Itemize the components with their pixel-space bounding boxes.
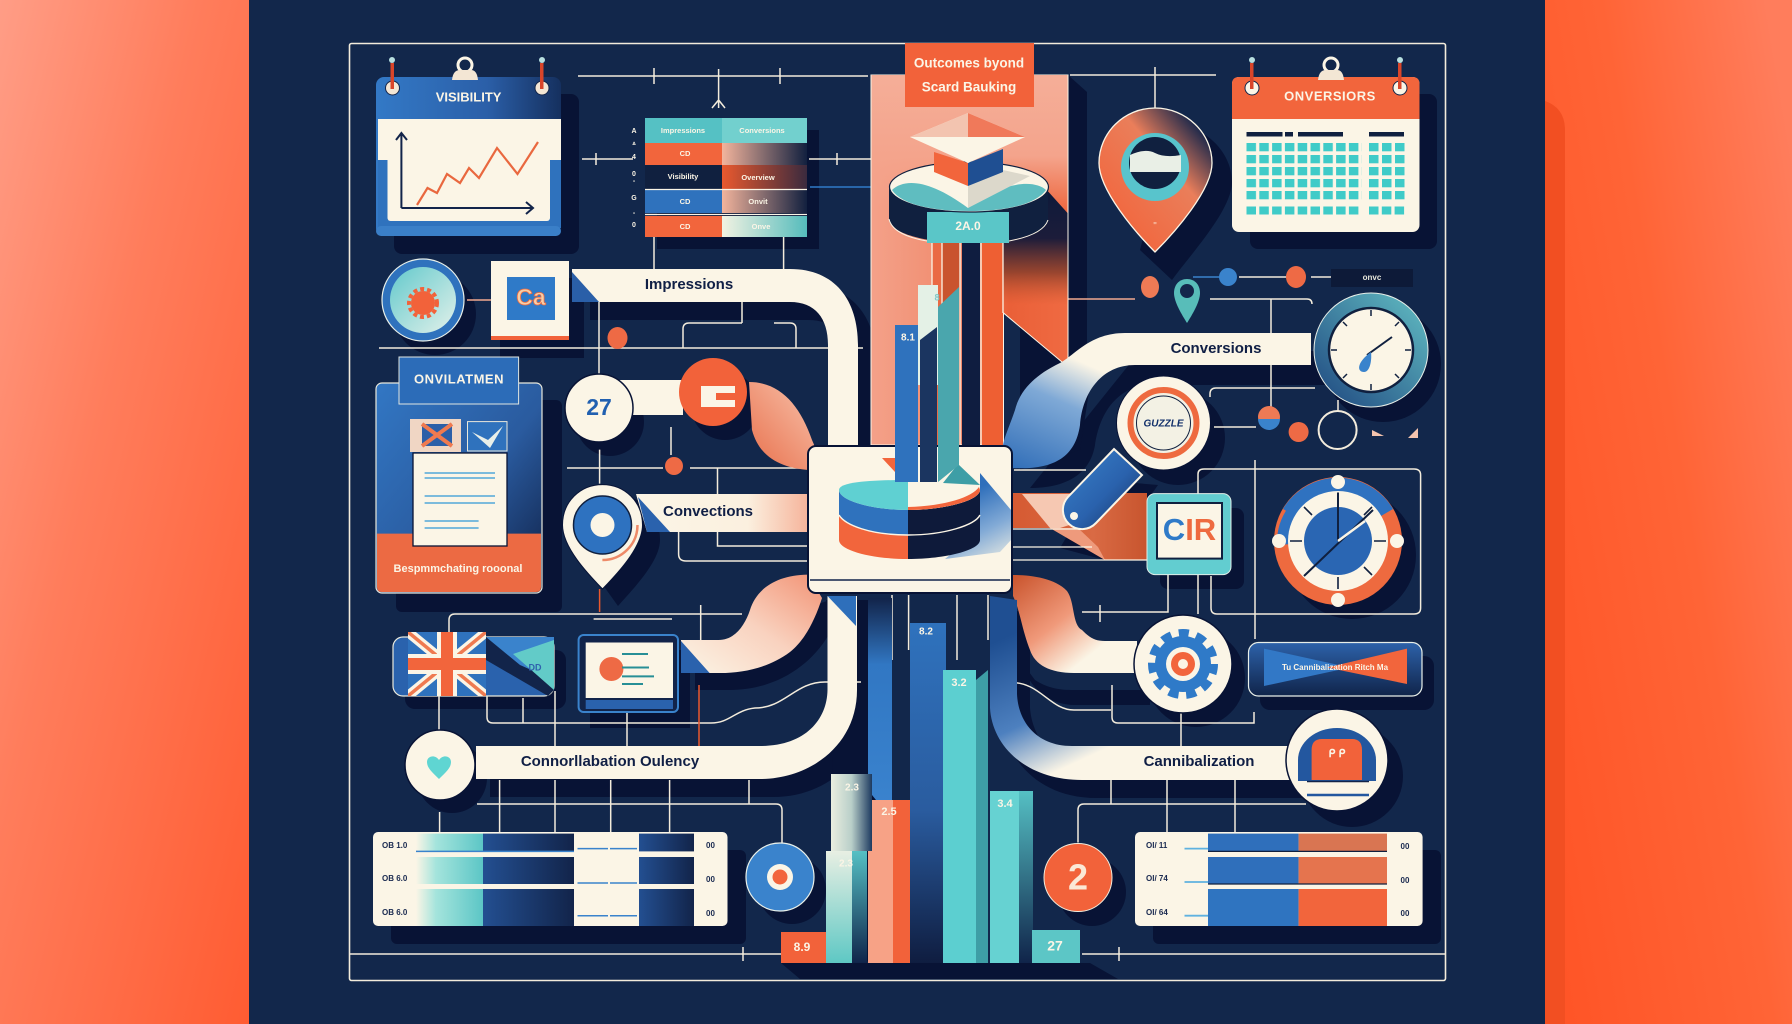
bar: teal short <box>990 791 1033 963</box>
table: lower left <box>373 832 728 926</box>
panel: visibility card: VISIBILITY <box>436 89 502 104</box>
table: lower left: 00 <box>706 875 715 884</box>
table: top data rows <box>631 118 807 237</box>
card: CIR: CIR <box>1163 512 1216 547</box>
ribbon: 27 connector <box>599 380 683 415</box>
bars rising from centre: 8 <box>934 292 940 302</box>
table: lower right: 00 <box>1401 876 1410 885</box>
table: lower left: 00 <box>706 841 715 850</box>
ribbon: cannibalization <box>990 596 1290 780</box>
tower column stripes <box>932 243 1003 445</box>
icon: gear <box>1134 615 1232 713</box>
badge: 27 <box>565 374 633 442</box>
bar: orange <box>868 800 910 963</box>
panel: centre box <box>808 446 1012 593</box>
icon: pedestal with cube and cap: 2A.0 <box>955 219 981 233</box>
table: top data rows: 0 <box>632 171 636 178</box>
icon: clock <box>1272 475 1404 607</box>
ribbon: conversions lower left: Convections <box>663 503 753 520</box>
icon: gauge <box>1314 293 1428 407</box>
bar: blue far left <box>868 598 892 820</box>
table: lower left: OB 6.0 <box>382 908 408 917</box>
ribbon: conversions lower left <box>636 494 808 532</box>
icon: cannibalization badge <box>1286 709 1388 811</box>
ribbon: conversions upper right <box>1003 333 1311 468</box>
table: lower right: 00 <box>1401 909 1410 918</box>
panel: document card <box>376 357 542 593</box>
icon: magnifier <box>1063 376 1210 529</box>
bar: pale back: 2.3 <box>845 783 859 794</box>
dot: orange marker <box>608 327 628 349</box>
label: dark tag <box>1331 269 1413 287</box>
table: top data rows: CD <box>680 222 691 231</box>
table: top data rows: - <box>633 178 636 185</box>
icon: orange toggle <box>679 358 747 426</box>
binder pins <box>1245 57 1407 95</box>
calendar grid <box>1246 132 1408 210</box>
bar: pale teal front <box>826 851 867 963</box>
nodes: top right <box>1141 266 1306 323</box>
table: top data rows: Conversions <box>739 126 785 135</box>
card: CA logo: Ca <box>516 284 546 310</box>
badge: 27: 27 <box>586 394 612 420</box>
icon: UK flag tag <box>393 632 554 696</box>
blob: coral connector <box>749 382 825 470</box>
table: lower left: OB 6.0 <box>382 874 408 883</box>
table: lower left: OB 1.0 <box>382 841 408 850</box>
line chart <box>396 133 538 214</box>
icon: blue target <box>746 843 814 911</box>
table: lower right: 00 <box>1401 842 1410 851</box>
coral wedge right of centre <box>1013 493 1147 560</box>
label block: orange 8.9 <box>781 932 826 963</box>
table: top data rows: Overview <box>741 173 775 182</box>
table: lower right <box>1135 832 1423 926</box>
table: top data rows: A <box>631 128 637 135</box>
panel: conversions calendar <box>1232 57 1420 232</box>
bars rising from centre: 8.1 <box>901 333 915 344</box>
bar: tall teal <box>943 670 988 963</box>
title tag: Scard Bauking <box>922 80 1016 95</box>
icon: cannibalization badge: ᑭ ᑭ <box>1329 748 1346 760</box>
bar: tall blue: 8.2 <box>919 627 933 638</box>
table: top data rows: Onvit <box>748 197 768 206</box>
table: top data rows: G <box>631 195 637 202</box>
table: lower left: 00 <box>706 909 715 918</box>
icon: UK flag tag: DD <box>528 662 542 672</box>
left coral side panel <box>0 0 249 1024</box>
table: top data rows: Onve <box>752 222 770 231</box>
pill: comparison <box>1248 642 1422 696</box>
ribbon: impressions <box>572 269 858 450</box>
icon: logo circle <box>382 259 464 341</box>
bar: tall blue <box>910 623 946 963</box>
table: top data rows: 4 <box>632 154 636 161</box>
title tag: Outcomes byond <box>914 56 1024 71</box>
flag <box>408 632 486 696</box>
table: top data rows: CD <box>680 149 691 158</box>
ribbon: connector outcome: Connorllabation Oulency <box>521 753 700 770</box>
document <box>413 453 507 546</box>
icon: heart circle <box>405 730 475 800</box>
outer frame <box>350 44 1446 980</box>
title tag <box>905 43 1034 107</box>
dot: orange pin <box>665 457 683 475</box>
panel: visibility card <box>376 57 561 236</box>
heading tag <box>399 357 519 404</box>
bar: pale teal front: 2.3 <box>839 859 853 870</box>
card: CA logo <box>491 261 569 340</box>
icon: map pin top <box>1099 108 1212 252</box>
table: lower right: OI/ 11 <box>1146 841 1168 850</box>
pill: comparison: Tu Cannibalization Ritch Ma <box>1282 663 1389 672</box>
badge: 2 <box>1044 844 1112 912</box>
bars rising from centre <box>895 285 959 482</box>
icon: pedestal with cube and cap <box>889 113 1048 243</box>
label: dark tag: onvc <box>1363 273 1382 282</box>
label block: teal 27 <box>1032 930 1080 963</box>
bar: tall teal: 3.2 <box>951 677 967 689</box>
binder pins <box>386 57 549 95</box>
icon: magnifier: GUZZLE <box>1144 419 1184 430</box>
table: top data rows: CD <box>680 197 691 206</box>
icon: centre cylinder <box>839 458 1011 559</box>
bar: pale back <box>831 774 872 851</box>
ribbon: lower left coral <box>681 575 822 673</box>
ribbon: connector outcome <box>476 596 857 779</box>
connector lines <box>349 67 1446 961</box>
table: top data rows: - <box>633 210 636 217</box>
panel: conversions calendar: ONVERSIORS <box>1284 88 1376 103</box>
panel: document card: Bespmmchating rooonal <box>394 563 522 575</box>
label block: orange 8.9: 8.9 <box>794 940 811 954</box>
cast shadows behind elements <box>391 75 1441 979</box>
table: top data rows: Impressions <box>661 126 705 135</box>
table: lower right: OI/ 74 <box>1146 874 1168 883</box>
panel: tower backdrop <box>871 75 1068 445</box>
icon: map pin top: " <box>1153 221 1157 230</box>
right orange side panel <box>1545 0 1792 1024</box>
table: top data rows: ᐞ <box>632 141 636 149</box>
small balls and ring <box>1258 406 1418 449</box>
table: lower right: OI/ 64 <box>1146 908 1168 917</box>
table: top data rows: Visibility <box>668 172 699 181</box>
label block: teal 27: 27 <box>1047 938 1063 954</box>
bar: orange: 2.5 <box>881 806 897 818</box>
bar: teal short: 3.4 <box>997 798 1014 810</box>
ribbon: impressions: Impressions <box>645 276 733 293</box>
card: CIR <box>1147 494 1231 575</box>
ribbon: conversions upper right: Conversions <box>1171 340 1261 357</box>
heading tag: ONVILATMEN <box>414 371 504 386</box>
badge: 2: 2 <box>1068 857 1088 898</box>
ribbon: lower right coral <box>1013 575 1137 673</box>
mini flags <box>410 419 507 452</box>
ribbon: cannibalization: Cannibalization <box>1144 753 1254 770</box>
icon: screen card <box>579 635 678 712</box>
icon: target pin <box>562 485 642 589</box>
table: top data rows: 0 <box>632 222 636 229</box>
